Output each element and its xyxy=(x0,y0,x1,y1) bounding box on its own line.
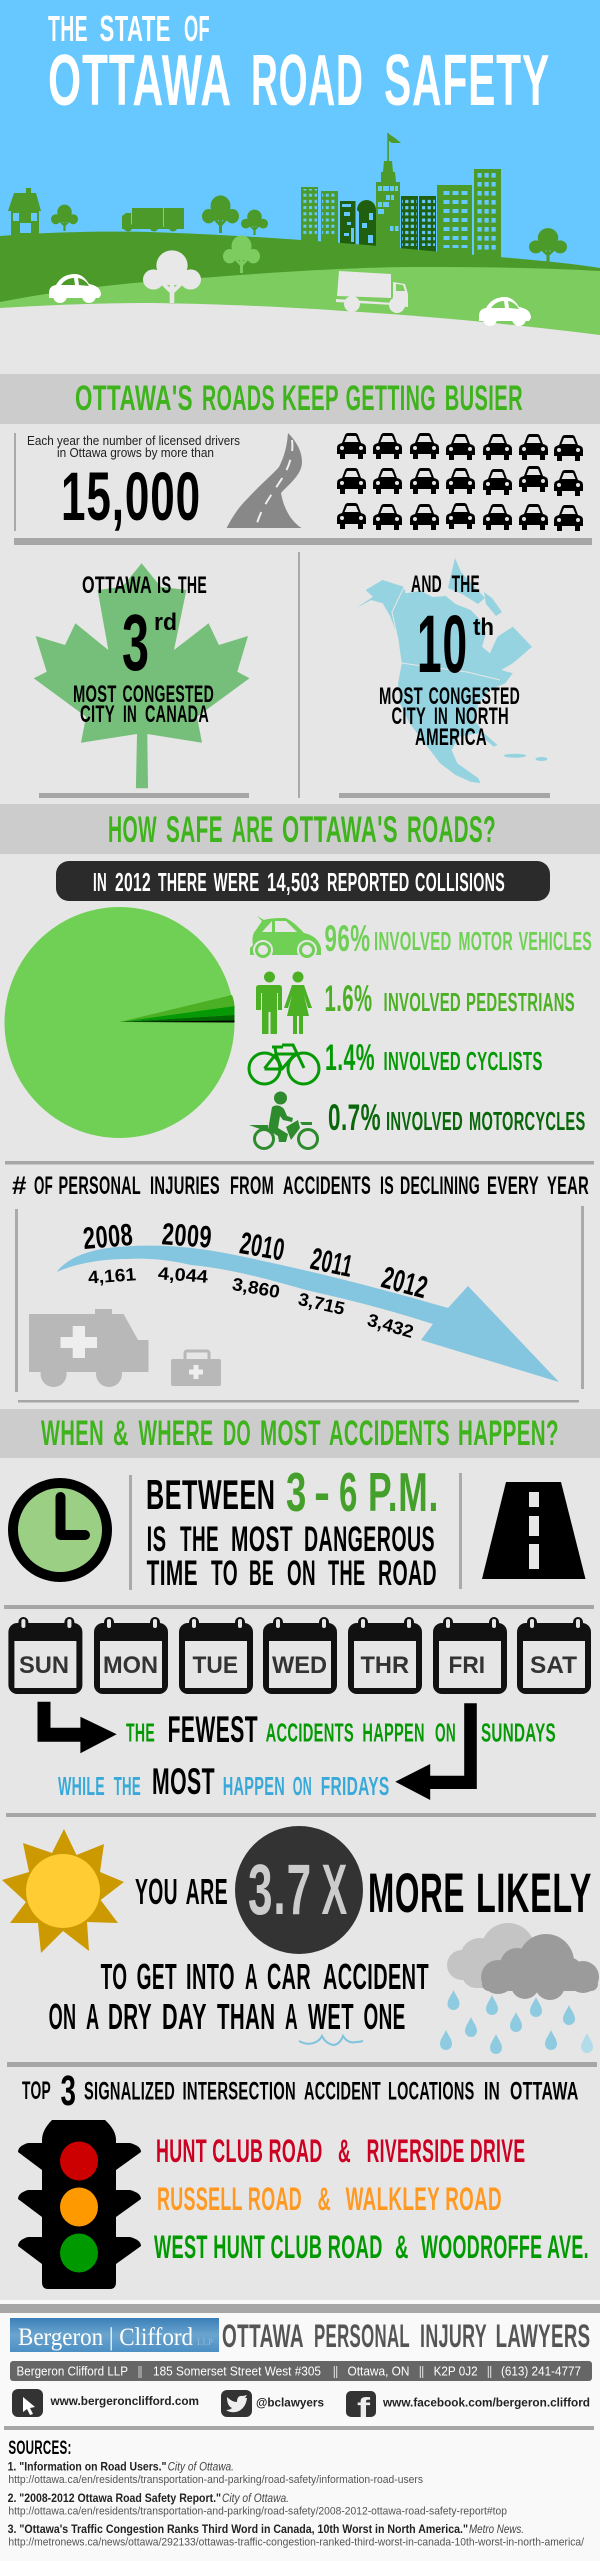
location: West Hunt Club and Woodroffe: & xyxy=(395,2229,409,2265)
house xyxy=(8,188,41,235)
text block: drivers: in Ottawa grows by more than xyxy=(57,445,214,460)
text: dry day: DAY xyxy=(162,1996,207,2037)
injury values: 3,715 xyxy=(296,1289,347,1319)
text block: rank North America: AND xyxy=(411,571,442,598)
text: dry day: THAN xyxy=(217,1996,276,2037)
injuries declining chart xyxy=(29,1216,559,1387)
label: CYCLISTS xyxy=(466,1046,543,1076)
stat 0.7%: 0.7% xyxy=(328,1097,381,1138)
text: dry day: TO xyxy=(101,1956,127,1997)
text: dry day: CAR xyxy=(267,1956,311,1997)
twitter link xyxy=(221,2390,324,2417)
firm title: INJURY xyxy=(420,2318,487,2354)
badge: 3.7 X xyxy=(235,1826,363,1954)
text: fewest accidents: ON xyxy=(435,1718,456,1748)
source 1 xyxy=(8,2462,423,2486)
badge: 3.7 X: X xyxy=(322,1851,348,1930)
heading: injuries: EVERY xyxy=(487,1172,539,1200)
injury values xyxy=(87,1263,416,1342)
firm title xyxy=(222,2318,590,2354)
heading: top 3 intersections xyxy=(22,2067,579,2115)
text block: dangerous time: MOST xyxy=(231,1520,293,1559)
section header: when and where: ACCIDENTS xyxy=(329,1414,450,1453)
panel: tenth in North America xyxy=(356,558,548,783)
text block: rank North America: CONGESTED xyxy=(429,683,520,710)
tree xyxy=(202,195,239,233)
icon: motorcycle xyxy=(249,1092,318,1148)
row: pedestrians xyxy=(256,972,575,1034)
label: INVOLVED xyxy=(384,1046,461,1076)
twitter link: @bclawyers xyxy=(256,2396,324,2410)
label: MOTOR xyxy=(458,926,513,956)
section header: how safe: ROADS? xyxy=(407,809,496,850)
row: cyclists xyxy=(249,1037,543,1084)
text: dry day: A xyxy=(285,1996,298,2037)
arrow: Friday xyxy=(395,1703,477,1800)
location: West Hunt Club and Woodroffe: WEST HUNT CLUB ROAD xyxy=(154,2229,383,2265)
text: dry day: ON xyxy=(49,1996,76,2037)
city buildings xyxy=(301,133,501,262)
text block: dangerous time: TIME xyxy=(147,1554,198,1593)
calendar: Sunday: SUN xyxy=(19,1652,69,1679)
heading: top 3 intersections: ACCIDENT xyxy=(304,2078,381,2106)
address bar: || xyxy=(138,2364,142,2379)
text: dry day: GET xyxy=(137,1956,177,1997)
year labels xyxy=(82,1216,432,1305)
address bar: K2P 0J2 xyxy=(434,2364,478,2379)
text block: dangerous time: BE xyxy=(249,1554,274,1593)
heading: top 3 intersections: IN xyxy=(484,2078,500,2106)
section header: when and where: WHEN xyxy=(41,1414,104,1453)
text: fewest accidents: FEWEST xyxy=(168,1709,258,1750)
source 2 xyxy=(8,2493,507,2518)
light hill xyxy=(0,267,600,345)
injury values: 4,161 xyxy=(87,1264,137,1288)
text: dry day: DRY xyxy=(108,1996,152,2037)
source 3: Metro News. xyxy=(469,2524,524,2536)
location: Russell and Walkley: & xyxy=(318,2181,331,2217)
text block: dangerous time xyxy=(146,1461,439,1593)
address bar: (613) 241-4777 xyxy=(501,2364,581,2379)
section header: when and where xyxy=(0,1409,600,1458)
text: fewest accidents: HAPPEN xyxy=(362,1718,425,1748)
truck white xyxy=(336,271,408,313)
source 2: http://ottawa.ca/en/residents/transportation-and-parking/road-safety/2008-2012-ottawa-road-safety-report#top xyxy=(8,2506,507,2518)
year labels: 2012 xyxy=(378,1260,432,1305)
heading: top 3 intersections: SIGNALIZED xyxy=(84,2078,175,2106)
car white xyxy=(49,274,101,303)
text block: rank Canada: IS xyxy=(157,572,172,599)
car white xyxy=(479,297,531,326)
label xyxy=(374,926,592,956)
text block: rank North America: th xyxy=(473,614,494,641)
title small: OF xyxy=(184,8,210,49)
text: dry day xyxy=(49,1956,429,2037)
text block: dangerous time: ON xyxy=(287,1554,316,1593)
label: INVOLVED xyxy=(386,1106,463,1136)
text block: dangerous time: 6 xyxy=(339,1461,358,1523)
text: most accidents: ON xyxy=(293,1771,312,1801)
text block: dangerous time: IS xyxy=(147,1520,166,1559)
arrow: decline xyxy=(57,1246,559,1382)
row: motorcycles xyxy=(249,1092,586,1148)
source 2: 2. "2008-2012 Ottawa Road Safety Report." xyxy=(8,2493,221,2505)
text: most accidents: HAPPEN xyxy=(223,1771,285,1801)
website link xyxy=(12,2389,199,2417)
section header: busier: BUSIER xyxy=(445,379,523,418)
title large xyxy=(48,41,550,121)
collisions banner: WERE xyxy=(214,867,260,897)
title small: THE xyxy=(48,8,88,49)
text block: dangerous time: - xyxy=(314,1461,331,1523)
injury values: 4,044 xyxy=(157,1263,209,1287)
truck small xyxy=(122,208,184,232)
text block: dangerous time: BETWEEN xyxy=(146,1471,276,1518)
number 15,000: 15,000 xyxy=(61,458,201,535)
injury values: 3,432 xyxy=(365,1310,416,1342)
calendar: Monday xyxy=(94,1617,168,1694)
section header: busier: ROADS xyxy=(202,379,275,418)
website link: www.bergeronclifford.com xyxy=(50,2394,199,2408)
pie chart xyxy=(4,907,234,1138)
heading: top 3 intersections: TOP xyxy=(22,2077,51,2105)
icon: map of North America xyxy=(356,558,548,783)
panel: licensed drivers xyxy=(14,433,583,535)
calendar: Friday: FRI xyxy=(448,1652,485,1679)
text block: rank North America xyxy=(379,571,520,751)
icon: bicycle xyxy=(249,1045,319,1084)
dark hill xyxy=(0,232,600,330)
text block: rank North America: CITY xyxy=(392,703,426,730)
source 3: 3. "Ottawa's Traffic Congestion Ranks Third Word in Canada, 10th Worst in North America." xyxy=(8,2524,468,2536)
text block: rank North America: NORTH xyxy=(455,703,509,730)
year labels: 2010 xyxy=(237,1225,288,1268)
calendar: Thursday: THR xyxy=(360,1652,409,1679)
icon: rain clouds xyxy=(440,1923,599,2054)
tree light xyxy=(223,235,260,273)
text block: rank Canada: CONGESTED xyxy=(122,681,214,708)
grey road hill xyxy=(0,303,600,374)
row: motor vehicles xyxy=(250,916,592,959)
collisions banner: THERE xyxy=(158,867,207,897)
title small: STATE xyxy=(100,8,171,49)
text: dry day: A xyxy=(86,1996,100,2037)
collisions banner: IN xyxy=(93,867,107,897)
icon: people xyxy=(256,972,312,1034)
text block: rank North America: MOST xyxy=(379,683,423,710)
arrow: Sunday xyxy=(38,1702,117,1753)
title large: OTTAWA xyxy=(48,41,232,121)
text block: rank Canada: IN xyxy=(123,701,137,728)
text block: rank Canada: CITY xyxy=(80,701,115,728)
icon grid: cars xyxy=(337,433,583,531)
text block: rank Canada: THE xyxy=(178,572,207,599)
address bar xyxy=(10,2361,592,2381)
heading: injuries: # xyxy=(12,1172,27,1200)
firm title: PERSONAL xyxy=(314,2318,410,2354)
calendar: Wednesday xyxy=(263,1617,337,1694)
heading: injuries: OF xyxy=(34,1172,53,1200)
facebook link xyxy=(346,2391,590,2423)
logo: LLP xyxy=(197,2337,213,2347)
heading: injuries: ACCIDENTS xyxy=(283,1172,371,1200)
icon: ambulance xyxy=(29,1309,148,1387)
calendars row xyxy=(8,1617,591,1694)
location: Hunt Club and Riverside: & xyxy=(338,2133,351,2169)
text block: rank Canada xyxy=(73,572,214,728)
calendar: Saturday: SAT xyxy=(530,1652,577,1679)
year labels: 2008 xyxy=(82,1217,134,1256)
source 1: City of Ottawa. xyxy=(168,2462,234,2474)
title small xyxy=(48,8,210,49)
section header: busier: OTTAWA'S xyxy=(75,379,193,418)
text: most accidents: MOST xyxy=(152,1761,215,1802)
label: INVOLVED xyxy=(384,987,461,1017)
heading: injuries: DECLINING xyxy=(400,1172,480,1200)
text block: dangerous time: P.M. xyxy=(368,1461,439,1523)
text block: dangerous time: ROAD xyxy=(378,1554,437,1593)
text block: rank Canada: MOST xyxy=(73,681,117,708)
address bar: || xyxy=(487,2364,492,2379)
address bar: 185 Somerset Street West #305 xyxy=(153,2364,321,2379)
footer panel xyxy=(0,2300,600,2561)
icon: car xyxy=(250,916,321,959)
hero panel xyxy=(0,0,600,374)
section header: busier: KEEP xyxy=(282,379,339,418)
badge: 3.7 X: 3.7 xyxy=(248,1851,312,1930)
text: dry day: ONE xyxy=(364,1996,406,2037)
section header: busier: GETTING xyxy=(346,379,436,418)
icon: water waves xyxy=(299,2036,363,2045)
address bar: Bergeron Clifford LLP xyxy=(16,2364,128,2379)
text block: dangerous time: THE xyxy=(328,1554,366,1593)
section header: how safe: HOW xyxy=(108,809,157,850)
text block: dangerous time: DANGEROUS xyxy=(304,1520,435,1559)
text block: rank North America: AMERICA xyxy=(415,724,487,751)
text: fewest accidents: THE xyxy=(126,1718,155,1748)
text: you are: YOU xyxy=(135,1871,178,1912)
heading: injuries xyxy=(12,1172,589,1200)
text block: rank Canada: OTTAWA xyxy=(82,572,152,599)
icon: road xyxy=(227,433,302,528)
stat 1.4%: 1.4% xyxy=(325,1037,375,1078)
heading: top 3 intersections: INTERSECTION xyxy=(182,2078,296,2106)
text: most accidents xyxy=(58,1761,390,1802)
calendar: Tuesday xyxy=(179,1617,253,1694)
calendar: Thursday xyxy=(348,1617,422,1694)
tree xyxy=(529,228,567,262)
collisions banner: COLLISIONS xyxy=(415,867,505,897)
calendar: Wednesday: WED xyxy=(272,1652,327,1679)
text block: drivers xyxy=(27,433,240,460)
stat 96%: 96% xyxy=(324,918,370,959)
location: Hunt Club and Riverside: HUNT CLUB ROAD xyxy=(156,2133,323,2169)
text: dry day: WET xyxy=(308,1996,354,2037)
tree xyxy=(51,205,78,231)
text: most accidents: THE xyxy=(114,1771,141,1801)
collisions banner: 2012 xyxy=(115,867,151,897)
source 2: City of Ottawa. xyxy=(222,2493,289,2505)
section header: how safe xyxy=(0,804,600,854)
section header: how safe: SAFE xyxy=(166,809,223,850)
calendar: Saturday xyxy=(517,1617,591,1694)
calendar: Monday: MON xyxy=(103,1652,158,1679)
source 1: http://ottawa.ca/en/residents/transportation-and-parking/road-safety/information-road-users xyxy=(8,2474,423,2486)
stat 1.6%: 1.6% xyxy=(324,978,372,1019)
heading: injuries: IS xyxy=(380,1172,394,1200)
title large: ROAD xyxy=(251,41,364,121)
text: you are: ARE xyxy=(186,1871,228,1912)
tree xyxy=(241,210,268,235)
facebook link: f xyxy=(357,2392,371,2423)
collisions banner: 14,503 xyxy=(267,867,320,897)
heading: top 3 intersections: LOCATIONS xyxy=(388,2078,474,2106)
text block: rank North America: IN xyxy=(434,703,448,730)
year labels: 2011 xyxy=(308,1241,356,1284)
text block: rank North America: 10 xyxy=(417,599,468,690)
icon: traffic light xyxy=(18,2120,141,2289)
text: fewest accidents xyxy=(126,1709,556,1750)
label xyxy=(386,1106,586,1136)
calendar: Friday xyxy=(433,1617,507,1694)
collisions banner: REPORTED xyxy=(327,867,410,897)
text: fewest accidents: ACCIDENTS xyxy=(266,1718,354,1748)
address bar: || xyxy=(333,2364,338,2379)
section header: when and where: WHERE xyxy=(138,1414,214,1453)
address bar: Ottawa, ON xyxy=(348,2364,410,2379)
collisions banner xyxy=(56,861,550,901)
text: most accidents: WHILE xyxy=(58,1771,105,1801)
icon: road ahead xyxy=(482,1482,586,1579)
icon: sun xyxy=(2,1829,124,1953)
text: more likely: MORE xyxy=(368,1861,465,1924)
location: Russell and Walkley: RUSSELL ROAD xyxy=(157,2181,302,2217)
text: most accidents: FRIDAYS xyxy=(321,1771,390,1801)
label: INVOLVED xyxy=(374,926,452,956)
section header: when and where: DO xyxy=(223,1414,251,1453)
sources heading: SOURCES: xyxy=(8,2438,72,2459)
icon: medical kit xyxy=(171,1351,221,1386)
source 3 xyxy=(8,2524,585,2549)
section header: how safe: ARE xyxy=(232,809,274,850)
source 1: 1. "Information on Road Users." xyxy=(8,2462,166,2474)
section header: when and where: & xyxy=(113,1414,129,1453)
text: dry day: A xyxy=(245,1956,258,1997)
text block: rank North America: THE xyxy=(452,571,480,598)
year labels: 2009 xyxy=(161,1216,213,1255)
text block: dangerous time: 3 xyxy=(286,1461,307,1523)
logo: Bergeron | Clifford xyxy=(18,2324,193,2351)
text block: rank Canada: 3 xyxy=(122,598,150,687)
firm title: OTTAWA xyxy=(222,2318,304,2354)
facebook link: www.facebook.com/bergeron.clifford xyxy=(382,2396,590,2410)
icon: maple leaf xyxy=(34,563,250,788)
heading: injuries: PERSONAL xyxy=(58,1172,141,1200)
text block: rank Canada: CANADA xyxy=(145,701,209,728)
panel: third in Canada xyxy=(34,563,250,788)
text block: dangerous time: THE xyxy=(180,1520,219,1559)
address bar: || xyxy=(419,2364,424,2379)
section header: how safe: OTTAWA'S xyxy=(282,809,398,850)
calendar: Sunday xyxy=(8,1617,82,1694)
tree pale xyxy=(143,250,201,303)
section header: busier xyxy=(0,374,600,424)
text: dry day: ACCIDENT xyxy=(323,1956,429,1997)
text block: rank Canada: rd xyxy=(154,609,177,636)
calendar: Tuesday: TUE xyxy=(192,1652,238,1679)
injury values: 3,860 xyxy=(231,1274,281,1302)
text block: drivers: Each year the number of licensed drivers xyxy=(27,433,240,448)
icon: clock xyxy=(8,1478,112,1582)
text block: dangerous time: TO xyxy=(211,1554,238,1593)
section header: when and where: MOST xyxy=(260,1414,321,1453)
heading: top 3 intersections: 3 xyxy=(60,2067,76,2115)
text: dry day: INTO xyxy=(186,1956,235,1997)
heading: injuries: FROM xyxy=(230,1172,274,1200)
heading: injuries: INJURIES xyxy=(150,1172,220,1200)
